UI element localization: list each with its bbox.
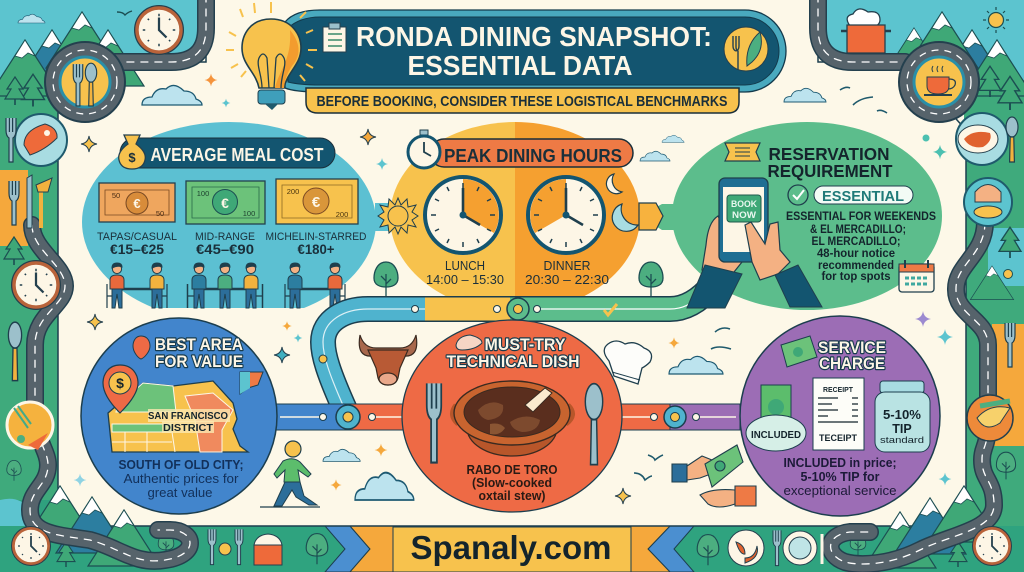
reservation note: 48-hour notice <box>817 246 895 260</box>
subtitle banner <box>306 88 739 113</box>
decorative clouds and sparkles <box>74 74 953 504</box>
reservation note: recommended <box>818 258 894 272</box>
heading: reservation requirement: RESERVATION <box>768 144 890 164</box>
banknote: 100 euro: 100 <box>243 209 255 218</box>
receipt: TECEIPT <box>819 433 857 444</box>
lunch hours label: LUNCH <box>445 259 485 273</box>
icon: ticket <box>725 143 760 161</box>
panel: must-try technical dish <box>402 320 622 512</box>
diners at tables <box>107 263 345 308</box>
title text: ESSENTIAL DATA <box>408 50 632 81</box>
dinner hours label: DINNER <box>544 259 590 273</box>
icon: check <box>788 185 808 205</box>
value note <box>118 457 244 500</box>
heading: average meal cost <box>120 138 335 168</box>
value note: SOUTH OF OLD CITY; <box>118 457 244 472</box>
icon: steak <box>456 335 482 350</box>
price: michelin-starred: MICHELIN-STARRED <box>266 231 367 243</box>
title text: RONDA DINING SNAPSHOT: <box>356 21 712 52</box>
heading: average meal cost: AVERAGE MEAL COST <box>150 145 324 165</box>
heading: service charge <box>818 339 886 373</box>
included badge: INCLUDED <box>751 429 801 441</box>
service note: INCLUDED in price; <box>784 456 896 470</box>
connector: bottom row bands <box>275 404 740 430</box>
banknote: 200 euro <box>276 179 358 224</box>
icon: stopwatch <box>408 130 440 168</box>
heading: peak dining hours <box>430 139 633 167</box>
service note <box>784 456 897 498</box>
dinner clock <box>528 177 604 253</box>
title text <box>356 21 712 81</box>
banknote: 50 euro: € <box>133 196 141 211</box>
included badge <box>746 385 806 451</box>
icon: cooking pot top right <box>841 9 891 53</box>
badge: essential: ESSENTIAL <box>822 189 904 205</box>
dish description: RABO DE TORO <box>466 463 558 477</box>
heading: reservation requirement <box>768 144 893 181</box>
icon: phone in hands <box>687 178 822 308</box>
panel: service charge <box>740 316 940 516</box>
bottom border icons <box>208 529 822 566</box>
dish description <box>466 463 558 503</box>
icon: bull head <box>359 335 417 385</box>
tip jar: TIP <box>892 422 912 436</box>
badge: essential <box>814 186 913 205</box>
banknote: 100 euro: € <box>221 195 229 211</box>
price: michelin-starred <box>266 231 367 257</box>
banknote: 50 euro <box>99 183 175 222</box>
value note: Authentic prices for <box>124 471 239 486</box>
heading: must-try technical dish <box>446 336 580 371</box>
icon: phone in hands: NOW <box>732 210 757 220</box>
district map: SAN FRANCISCO <box>148 410 228 422</box>
banknote: 200 euro: 200 <box>287 187 299 196</box>
price: tapas/casual: TAPAS/CASUAL <box>97 231 177 243</box>
flow path connecting panels <box>319 286 712 412</box>
district map: DISTRICT <box>163 422 214 434</box>
icon: fork and leaf badge <box>724 27 768 71</box>
dish description: oxtail stew) <box>478 489 546 503</box>
banknote: 50 euro: 50 <box>156 209 164 218</box>
connector tag <box>639 203 663 230</box>
icon: moons <box>606 174 638 231</box>
heading: best area for value: BEST AREA <box>155 336 243 354</box>
tip jar <box>875 381 930 452</box>
receipt <box>813 378 864 450</box>
road circle: coffee <box>899 42 979 122</box>
tip jar: standard <box>880 435 924 446</box>
heading: peak dining hours: PEAK DINING HOURS <box>444 146 622 166</box>
icon: spoon <box>585 384 603 465</box>
receipt: RECEIPT <box>823 385 853 394</box>
district map <box>108 381 248 452</box>
trees between panels <box>374 262 663 296</box>
price: tapas/casual <box>97 231 177 257</box>
heading: service charge: CHARGE <box>819 355 885 373</box>
icon: light bulb <box>226 2 317 110</box>
banknote: 50 euro: 50 <box>112 191 120 200</box>
banknote: 100 euro: 100 <box>197 189 209 198</box>
price: michelin-starred: €180+ <box>298 242 335 257</box>
value note: great value <box>148 485 212 500</box>
lunch hours value: 14:00 – 15:30 <box>426 272 504 287</box>
footer: website banner: Spanaly.com <box>410 529 612 566</box>
icon: sun <box>378 198 418 234</box>
footer: website banner <box>393 527 631 572</box>
price: tapas/casual: €15–€25 <box>110 242 164 257</box>
reservation note: EL MERCADILLO; <box>812 234 900 248</box>
icon: chef hat <box>604 341 652 384</box>
heading: service charge: SERVICE <box>818 339 886 357</box>
icon: stew pot <box>452 381 573 456</box>
price: mid-range: €45–€90 <box>196 242 254 257</box>
bottom border <box>0 499 1024 572</box>
right border landscape <box>825 0 1024 572</box>
icon: banknote <box>781 336 817 367</box>
dinner hours value: 20:30 – 22:30 <box>525 272 609 287</box>
icon: clipboard <box>323 23 346 52</box>
service note: 5-10% TIP for <box>800 470 880 484</box>
icon: money bag <box>119 135 145 169</box>
icon: hands exchanging money <box>672 445 756 507</box>
reservation note: & EL MERCADILLO; <box>810 222 906 236</box>
icon: walking person <box>260 441 320 507</box>
icon: sun <box>983 7 1009 33</box>
panel: average meal cost <box>82 122 388 308</box>
heading: must-try technical dish: TECHNICAL DISH <box>446 353 580 371</box>
icon: money bag: $ <box>128 150 136 165</box>
service note: exceptional service <box>784 484 897 498</box>
subtitle banner: BEFORE BOOKING, CONSIDER THESE LOGISTICAL BENCHMARKS <box>316 93 728 110</box>
icon: phone in hands: BOOK <box>731 199 757 209</box>
icon: flag <box>240 372 263 394</box>
heading: reservation requirement: REQUIREMENT <box>768 161 893 181</box>
panel: reservation requirement <box>639 122 942 310</box>
border plates and utensils <box>6 113 1018 481</box>
banknote: 200 euro: € <box>312 194 321 211</box>
heading: best area for value: FOR VALUE <box>155 353 243 371</box>
icon: fork <box>427 383 441 463</box>
banknote: 100 euro <box>186 181 265 224</box>
panel: best area for value <box>81 318 277 514</box>
road circle: fork and spoon <box>45 42 125 122</box>
icon: dollar pin <box>103 365 138 413</box>
price: mid-range <box>195 231 255 257</box>
icon: location pin <box>133 336 150 359</box>
reservation note <box>786 209 936 283</box>
title banner <box>285 10 786 92</box>
dish description: (Slow-cooked <box>472 476 552 490</box>
price: mid-range: MID-RANGE <box>195 231 255 243</box>
heading: must-try technical dish: MUST-TRY <box>484 336 566 354</box>
reservation note: for top spots <box>822 269 891 283</box>
reservation note: ESSENTIAL FOR WEEKENDS <box>786 209 936 223</box>
tip jar: 5-10% <box>883 408 921 422</box>
banknote: 200 euro: 200 <box>336 210 348 219</box>
left border landscape <box>0 0 200 572</box>
icon: calendar <box>899 260 934 292</box>
panel: peak dining hours <box>378 122 640 312</box>
icon: dollar pin: $ <box>116 375 124 391</box>
lunch clock <box>425 177 501 253</box>
heading: best area for value <box>155 336 243 371</box>
